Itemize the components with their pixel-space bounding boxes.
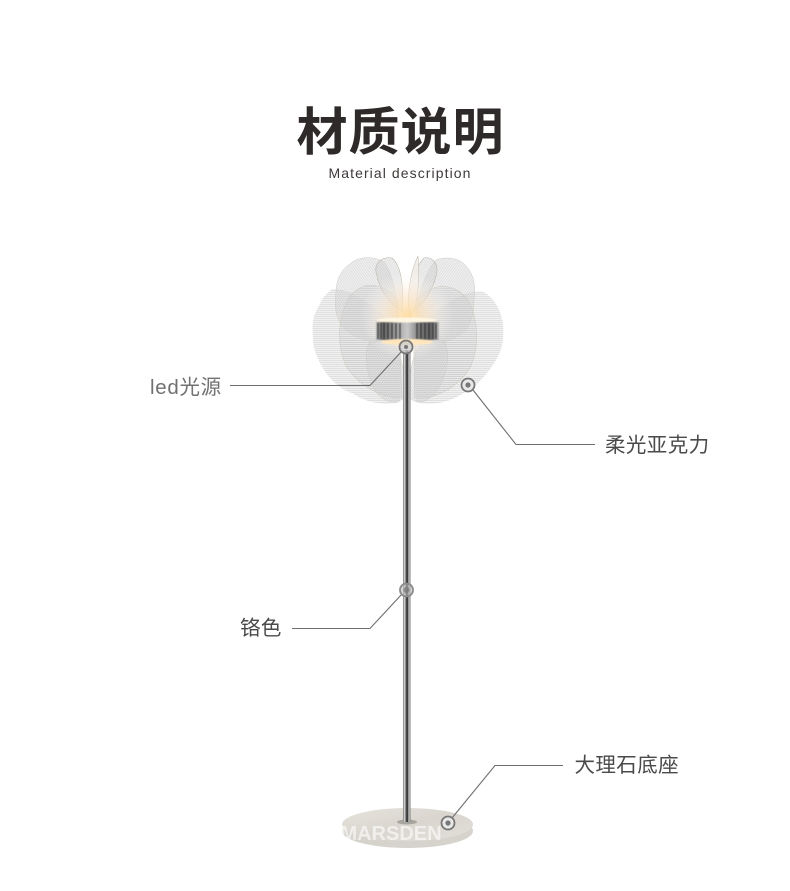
right upper lobe (414, 258, 475, 343)
right middle lobe (414, 286, 477, 398)
watermark: MARSDEN (340, 823, 442, 845)
callout: 大理石底座: 大理石底座 (574, 754, 679, 777)
led ring (376, 318, 439, 345)
callout: 柔光亚克力: 柔光亚克力 (605, 434, 710, 457)
left upper lobe (335, 258, 400, 342)
title: 材质说明 (296, 104, 505, 161)
right outer lobe (412, 292, 503, 404)
callout: 大理石底座 (442, 754, 679, 830)
subtitle: Material description (328, 165, 472, 181)
pole top (403, 352, 410, 402)
left lower lobe (366, 338, 404, 402)
callout: 柔光亚克力 (462, 378, 710, 457)
right lower lobe (410, 338, 448, 402)
left middle lobe (340, 285, 402, 398)
lamp pole (403, 350, 410, 810)
marble base (342, 800, 473, 848)
callout: led光源: led光源 (150, 376, 222, 399)
left outer lobe (313, 289, 402, 404)
callout: led光源 (150, 340, 412, 399)
floor lamp (313, 256, 503, 848)
centre blades (376, 258, 403, 312)
warm light glow (361, 272, 453, 360)
callout: 铬色 (240, 584, 413, 640)
callout: 铬色: 铬色 (240, 617, 282, 640)
lamp shade petals (313, 256, 503, 404)
